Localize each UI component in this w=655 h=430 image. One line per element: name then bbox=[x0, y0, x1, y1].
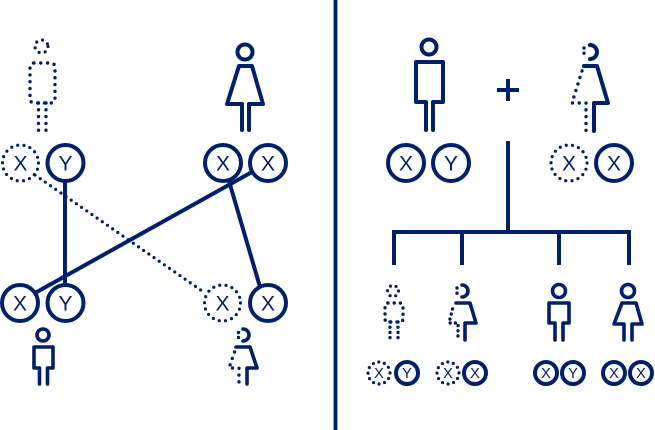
father chromosomes: Y bbox=[58, 152, 73, 176]
icon: carrier daughter bbox=[229, 329, 257, 385]
mother chromosomes bbox=[205, 145, 286, 181]
plus sign bbox=[497, 79, 519, 101]
father chromosomes bbox=[388, 145, 469, 181]
father chromosomes bbox=[2, 145, 84, 181]
panel: chromosome crossing bbox=[2, 40, 286, 385]
chromosomes: X Y bbox=[535, 362, 584, 384]
father chromosomes: X bbox=[13, 152, 28, 176]
mother chromosomes: X bbox=[216, 152, 230, 176]
son chromosomes bbox=[2, 285, 84, 321]
chromosomes: X X: X bbox=[636, 366, 646, 382]
chromosomes: X X bbox=[603, 362, 652, 384]
chromosomes: X Y: X bbox=[541, 366, 551, 382]
father chromosomes: Y bbox=[444, 152, 458, 176]
chromosomes: X dotted X: X bbox=[443, 366, 453, 382]
mother chromosomes: X bbox=[562, 152, 576, 176]
daughter chromosomes: X bbox=[261, 292, 275, 316]
icon: son bbox=[34, 329, 53, 384]
icon: carrier mother bbox=[572, 45, 608, 131]
chromosomes: X dotted X: X bbox=[470, 366, 480, 382]
son chromosomes: Y bbox=[58, 292, 73, 316]
icon: father bbox=[416, 40, 443, 130]
chromosomes: X Y: Y bbox=[568, 366, 578, 382]
tree connector bbox=[392, 141, 631, 265]
son chromosomes: X bbox=[13, 292, 27, 316]
daughter chromosomes: X bbox=[215, 292, 230, 316]
father chromosomes: X bbox=[399, 152, 413, 176]
daughter chromosomes bbox=[204, 285, 286, 321]
icon: carrier daughter bbox=[449, 285, 476, 340]
icon: dotted son bbox=[385, 286, 403, 340]
icon: son bbox=[549, 284, 569, 340]
mother chromosomes bbox=[551, 145, 632, 181]
divider bbox=[334, 0, 337, 430]
connector: mother X to son X bbox=[35, 172, 252, 293]
icon: mother bbox=[227, 44, 263, 130]
icon: dotted father bbox=[30, 40, 55, 131]
icon: daughter bbox=[614, 284, 642, 340]
mother chromosomes: X bbox=[261, 152, 275, 176]
mother chromosomes: X bbox=[607, 152, 621, 176]
chromosomes: X X: X bbox=[609, 366, 619, 382]
chromosomes: X dotted Y: X bbox=[374, 366, 384, 382]
connector: mother X to daughter X bbox=[229, 181, 260, 287]
chromosomes: X dotted X bbox=[437, 362, 486, 384]
chromosomes: X dotted Y: Y bbox=[402, 366, 412, 382]
chromosomes: X dotted Y bbox=[368, 362, 418, 384]
connector: dotted X to daughter dotted X bbox=[35, 175, 205, 293]
panel: family tree bbox=[368, 40, 652, 384]
connector: Y to son Y bbox=[63, 181, 67, 285]
